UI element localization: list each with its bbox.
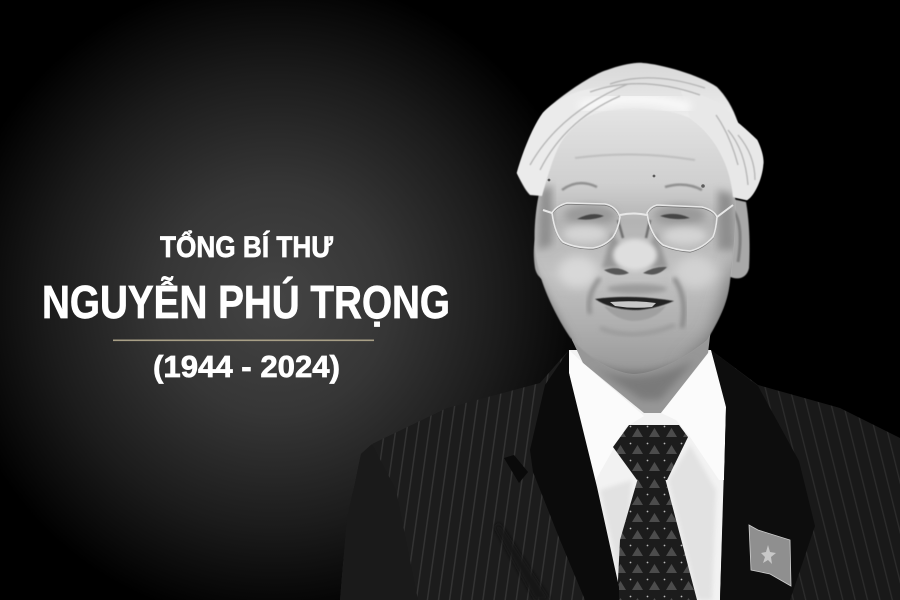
jacket left side [340,350,640,600]
left eye [577,214,604,220]
face shading [536,153,735,374]
badge flag [749,525,791,586]
divider rule [113,340,374,341]
nose body [613,239,657,271]
text: life dates: (1944 - 2024) [153,349,340,384]
cheek highlight left [558,256,598,288]
lapel pin badge [749,525,791,586]
right collar [661,350,726,480]
chin crease [600,325,675,334]
hair back mass [517,63,763,200]
nose bridge shadow [618,220,650,238]
hair strands [530,78,755,185]
mouth [595,297,674,321]
heading: title: TỔNG BÍ THƯ [160,230,333,264]
neck [572,310,712,413]
lapel lower edge shadow [494,524,550,600]
shirt [569,350,726,600]
lower lip [604,306,666,321]
face [534,114,736,374]
neck shadow [590,360,695,400]
moles [548,175,705,188]
portrait photo: man in suit [340,63,900,600]
forehead wrinkle [575,154,695,160]
jacket right side [700,350,900,600]
left lapel [530,350,619,600]
badge star [761,545,776,564]
eye socket left [564,205,616,225]
smile fold right [674,278,684,328]
lens cheek glow right [663,227,707,245]
shirt shadow [600,445,716,600]
chin shadow [602,362,674,374]
right lens [647,205,717,251]
smile fold left [589,278,600,314]
cheek highlight right [675,256,715,288]
temple shadow left [538,185,552,250]
left collar [569,350,644,483]
left nostril shadow [604,268,629,275]
nose side shadow [602,232,668,268]
right side lock [680,88,763,200]
tie blade [617,478,697,600]
left lens [552,203,620,248]
frame shadow [552,204,717,252]
bridge and temples [543,205,733,217]
face base [535,108,735,374]
right jaw shadow [682,255,732,357]
eye socket right [654,205,706,225]
necktie [613,425,697,600]
suit jacket [340,350,900,600]
left eyebrow [562,183,597,190]
right nostril shadow [643,267,667,275]
left jaw shadow [539,270,574,340]
lapel notch [504,455,528,483]
teeth [610,301,656,308]
right ear inner shadow [733,210,740,262]
heading: name: NGUYỄN PHÚ TRỌNG [42,276,450,328]
upper lip shade [607,284,667,294]
lens cheek glow left [563,225,607,243]
right eye [660,214,690,219]
hair top highlight [580,99,690,108]
right eyebrow [665,185,702,190]
eyeglasses [543,203,733,252]
text block: title and name [42,230,450,384]
left ear [534,232,550,280]
left sleeve shading [340,444,418,600]
hair front locks [517,78,763,200]
tie knot [613,425,688,480]
mouth opening [595,297,674,310]
nose [602,220,668,275]
left side lock [517,87,620,196]
temple shadow right [718,190,736,250]
right lapel [711,350,815,600]
right ear [728,198,750,278]
